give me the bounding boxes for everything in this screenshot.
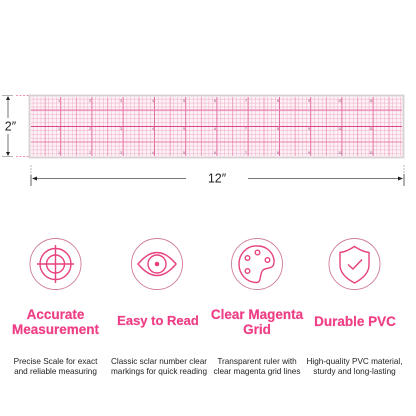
- height dimension: 2 inch: 2″: [5, 120, 17, 134]
- text: durable PVC description: [306, 357, 402, 376]
- heading: Clear Magenta Grid: [211, 307, 304, 336]
- ruler numbers: 10: [338, 151, 342, 155]
- ruler numbers: 3: [120, 151, 122, 155]
- ruler numbers: 3: [120, 127, 122, 131]
- text: durable PVC description: sturdy and long-lasting: [313, 367, 396, 376]
- ruler numbers: 3: [120, 99, 122, 103]
- ruler numbers: 11: [369, 151, 373, 155]
- ruler numbers: 9: [308, 99, 310, 103]
- heading: Clear Magenta Grid: Grid: [243, 322, 271, 336]
- ruler numbers: 7: [245, 127, 247, 131]
- ruler numbers: 9: [308, 127, 310, 131]
- heading: Accurate Measurement: [12, 307, 99, 336]
- text: magenta grid description: Transparent ruler with: [217, 357, 297, 366]
- text: accurate description: [14, 357, 98, 376]
- text: magenta grid description: [214, 357, 300, 376]
- ruler numbers: 2: [89, 151, 91, 155]
- text: accurate description: Precise Scale for exact: [14, 357, 97, 366]
- ruler numbers: 5: [183, 127, 185, 131]
- ruler numbers: 7: [245, 151, 247, 155]
- heading: Easy to Read: Easy to Read: [117, 313, 199, 328]
- text: durable PVC description: High-quality PVC material,: [306, 357, 402, 366]
- width dimension: 12 inch: 12″: [208, 172, 227, 186]
- text: easy to read description: Classic sclar number clear: [111, 357, 207, 366]
- icon: target: [30, 238, 81, 290]
- ruler numbers: 6: [214, 99, 216, 103]
- ruler numbers: 9: [308, 151, 310, 155]
- text: magenta grid description: clear magenta grid lines: [214, 367, 300, 376]
- ruler numbers: 5: [183, 99, 185, 103]
- ruler body: [30, 96, 404, 158]
- ruler numbers: 5: [183, 151, 185, 155]
- ruler numbers: 1: [58, 151, 60, 155]
- text: accurate description: and reliable measuring: [14, 367, 97, 376]
- ruler numbers: 8: [277, 127, 279, 131]
- ruler numbers: 4: [152, 99, 154, 103]
- heading: Clear Magenta Grid: Clear Magenta: [211, 307, 303, 322]
- ruler numbers: 11: [369, 127, 373, 131]
- ruler numbers: 8: [277, 99, 279, 103]
- ruler numbers: 11: [369, 99, 373, 103]
- ruler numbers: 6: [214, 127, 216, 131]
- ruler numbers: 8: [277, 151, 279, 155]
- ruler numbers: 10: [338, 127, 342, 131]
- height dimension: 2 inch: [2, 96, 29, 156]
- heading: Durable PVC: Durable PVC: [314, 314, 396, 329]
- ruler numbers: 1: [58, 127, 60, 131]
- width dimension: 12 inch: [31, 165, 404, 186]
- ruler numbers: 2: [89, 127, 91, 131]
- ruler numbers: 2: [89, 99, 91, 103]
- text: easy to read description: [111, 357, 207, 376]
- icon: palette: [232, 238, 282, 290]
- icon: shield: [329, 238, 380, 290]
- ruler numbers: 7: [245, 99, 247, 103]
- ruler numbers: [58, 99, 373, 155]
- ruler numbers: 1: [58, 99, 60, 103]
- ruler numbers: 4: [152, 127, 154, 131]
- text: easy to read description: markings for quick reading: [111, 367, 207, 376]
- heading: Accurate Measurement: Accurate: [27, 307, 84, 322]
- ruler numbers: 10: [338, 99, 342, 103]
- heading: Accurate Measurement: Measurement: [12, 322, 99, 336]
- ruler numbers: 4: [152, 151, 154, 155]
- icon: eye: [132, 238, 182, 290]
- ruler numbers: 6: [214, 151, 216, 155]
